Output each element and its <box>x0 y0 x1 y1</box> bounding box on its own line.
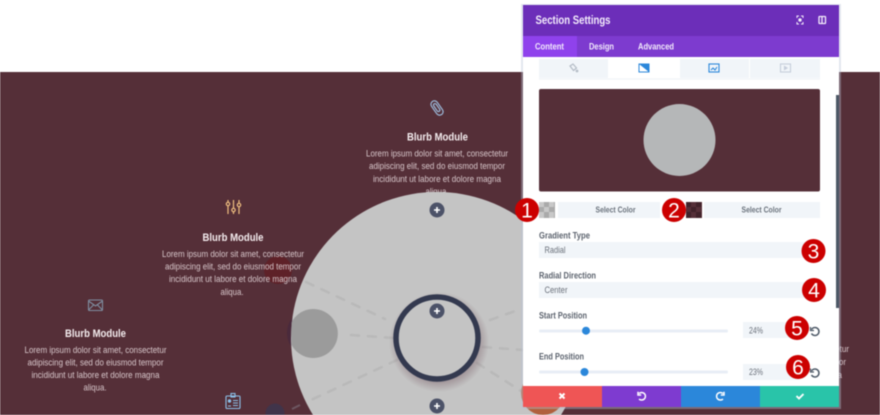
field: radial direction <box>539 270 820 298</box>
icon: video <box>780 64 790 72</box>
field: radial direction: Radial Direction <box>539 270 596 282</box>
field: end position: 23% <box>749 367 763 377</box>
panel shadow <box>521 4 841 409</box>
select colour button 1: Select Color <box>596 204 636 214</box>
header title: Section Settings <box>536 15 610 27</box>
active tab <box>523 36 577 57</box>
body text: Lorem ipsum dolor sit amet, consectetur <box>24 345 166 355</box>
dark red decorative circle <box>264 256 292 284</box>
callout 5 <box>785 316 809 340</box>
icon: split view <box>819 16 826 24</box>
body text: aliqua. <box>426 186 448 196</box>
icon: envelope <box>88 300 102 310</box>
blurb module: middle left <box>162 200 304 297</box>
body text: incididunt ut labore et dolore magna <box>169 274 297 284</box>
field: gradient type: Radial <box>544 245 566 255</box>
icon: paperclip <box>430 99 444 117</box>
tab: advanced: Advanced <box>638 42 674 52</box>
heading: Blurb Module <box>407 132 468 144</box>
body text <box>366 148 508 196</box>
callout 4: 4 <box>808 280 820 302</box>
blurb module: right, mostly behind panel: incididunt ut labore et dolore magna <box>714 370 842 380</box>
heading: Blurb Module <box>65 328 126 340</box>
body text: Lorem ipsum dolor sit amet, consectetur <box>162 249 304 259</box>
blurb module: lower left <box>24 300 166 392</box>
background type tabs <box>539 59 820 80</box>
plus button top <box>430 202 444 218</box>
icon: gradient <box>639 64 649 72</box>
icon: reset start <box>810 327 819 336</box>
body text: adipiscing elit, sed do eiusmod tempor <box>28 358 164 368</box>
callout 2: 2 <box>668 200 680 222</box>
callout 5: 5 <box>791 318 803 340</box>
tab: design: Design <box>589 42 614 52</box>
central ring shadow <box>389 292 489 392</box>
callout 3 <box>802 239 826 264</box>
blurb module: right, mostly behind panel: Lorem ipsum dolor sit amet, consectetur <box>707 344 849 354</box>
body text: aliqua. <box>220 287 244 297</box>
callout 4 <box>802 278 826 302</box>
body text: adipiscing elit, sed do eiusmod tempor <box>369 161 505 171</box>
dashed connector lines <box>306 282 523 400</box>
footer: undo <box>602 386 681 407</box>
icon: sliders <box>226 200 241 214</box>
icon: colour bucket <box>570 64 578 72</box>
icon: focus <box>797 16 803 24</box>
panel: section settings <box>521 4 841 409</box>
field: start position: 24% <box>749 326 763 336</box>
callout 1: 1 <box>521 200 533 222</box>
blurb module: right, mostly behind panel: adipiscing elit, sed do eiusmod tempor <box>710 357 846 367</box>
body text: aliqua. <box>84 382 106 392</box>
callout 6: 6 <box>792 356 804 380</box>
central ring <box>396 297 478 379</box>
scrollbar <box>836 95 839 308</box>
field: end position <box>539 352 800 380</box>
body text: adipiscing elit, sed do eiusmod tempor <box>165 262 301 272</box>
select colour button 1 <box>558 202 660 218</box>
large grey radial gradient circle <box>291 192 583 415</box>
field: gradient type: Gradient Type <box>539 230 590 242</box>
blurb module: top centre <box>366 99 508 196</box>
tab: content: Content <box>535 42 565 52</box>
body text: Lorem ipsum dolor sit amet, consectetur <box>366 148 508 158</box>
tab bar <box>523 36 839 57</box>
field: gradient type <box>539 230 820 258</box>
plus button centre <box>430 304 444 318</box>
callout 3: 3 <box>808 240 819 264</box>
blurb module: right, mostly behind panel <box>707 344 849 380</box>
gradient preview <box>539 89 820 192</box>
icon: image <box>709 64 719 72</box>
field: radial direction: Center <box>544 285 568 295</box>
field: start position: Start Position <box>539 310 587 322</box>
body text <box>162 249 304 297</box>
plus button bottom <box>430 398 444 414</box>
heading: Blurb Module <box>202 232 264 244</box>
dark circle behind left grey disc <box>287 308 336 358</box>
dashed line over background <box>292 405 300 409</box>
field: start position <box>539 310 800 338</box>
select colour button 2: Select Color <box>742 204 782 214</box>
orange circle <box>521 371 565 415</box>
icon: reset end <box>810 368 819 377</box>
callout 6 <box>786 355 810 380</box>
header bar <box>523 5 839 36</box>
footer: redo <box>681 386 760 407</box>
dark dotted circle at bottom <box>266 404 284 415</box>
footer: cancel <box>523 386 602 407</box>
field: end position: End Position <box>539 352 584 362</box>
select colour button 2 <box>704 202 820 218</box>
callout 1 <box>515 198 539 222</box>
colour swatch 1 <box>539 202 555 218</box>
icon: id card <box>226 394 240 408</box>
footer: save <box>760 386 839 407</box>
grey disc on left <box>291 309 338 358</box>
panel body <box>523 5 839 407</box>
colour swatch 2 <box>686 202 702 218</box>
body text <box>24 345 166 392</box>
callout 2 <box>662 198 686 222</box>
body text: incididunt ut labore et dolore magna <box>32 370 160 380</box>
body text: incididunt ut labore et dolore magna <box>373 174 501 184</box>
